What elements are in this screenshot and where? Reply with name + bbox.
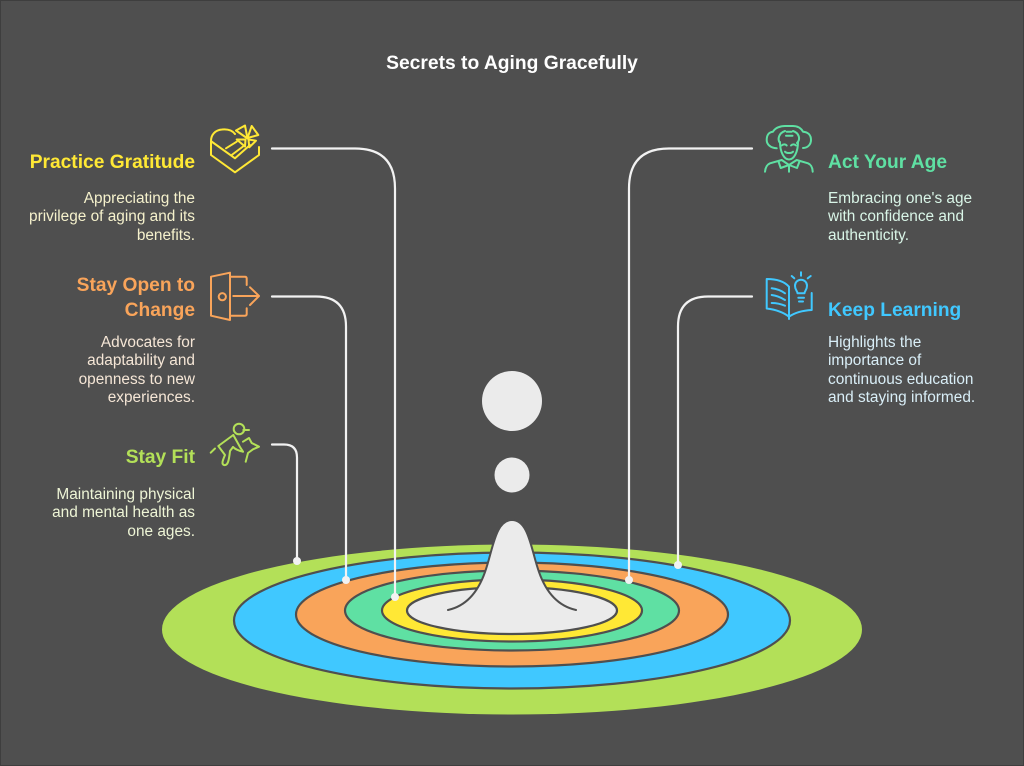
text: act your age xyxy=(828,190,972,244)
text: stay open to change: Advocates for xyxy=(101,334,195,351)
text: keep learning: continuous education xyxy=(828,371,973,388)
icon: heart gift box xyxy=(211,126,259,172)
ring: act your age xyxy=(345,570,679,650)
heading: practice gratitude: Practice Gratitude xyxy=(30,152,195,173)
dot: keep learning xyxy=(674,561,682,569)
heading: stay open to change: Stay Open to xyxy=(77,275,195,296)
text: practice gratitude: benefits. xyxy=(137,227,195,244)
peak outline xyxy=(448,520,576,610)
ring: stay open to change xyxy=(296,562,728,666)
text: keep learning xyxy=(828,334,975,406)
text: keep learning: importance of xyxy=(828,352,921,369)
text: practice gratitude: privilege of aging and its xyxy=(29,208,195,225)
connector: practice gratitude xyxy=(272,148,395,597)
connector: keep learning xyxy=(678,296,752,565)
text: stay fit: and mental health as xyxy=(52,504,195,521)
text: stay fit: Maintaining physical xyxy=(56,486,195,503)
ring: stay fit xyxy=(162,544,862,714)
dot: practice gratitude xyxy=(391,593,399,601)
connector: stay open to change xyxy=(272,296,346,580)
icon: exit door xyxy=(211,273,259,320)
title: Secrets to Aging Gracefully xyxy=(386,53,638,74)
peak xyxy=(448,520,576,610)
icon: book with light bulb xyxy=(767,272,812,319)
dot: stay fit xyxy=(293,557,301,565)
droplet: large xyxy=(482,371,542,431)
text: act your age: with confidence and xyxy=(828,208,964,225)
connectors xyxy=(272,148,752,597)
text: act your age: authenticity. xyxy=(828,227,909,244)
connector: stay fit xyxy=(272,444,297,561)
heading: stay open to change: Change xyxy=(125,300,195,321)
droplet: small xyxy=(494,458,530,492)
text: stay open to change: adaptability and xyxy=(87,352,195,369)
concentric rings xyxy=(162,544,862,714)
ring: keep learning xyxy=(234,552,790,688)
heading: keep learning: Keep Learning xyxy=(828,300,961,321)
heading: act your age: Act Your Age xyxy=(828,152,947,173)
text: act your age: Embracing one's age xyxy=(828,190,972,207)
icon: elderly person xyxy=(765,126,813,172)
text: practice gratitude: Appreciating the xyxy=(84,190,195,207)
ring: centre xyxy=(407,587,617,634)
ring: practice gratitude xyxy=(382,580,642,642)
connector dots xyxy=(293,557,682,601)
dot: act your age xyxy=(625,576,633,584)
text: practice gratitude xyxy=(29,190,195,244)
text: stay fit xyxy=(52,486,195,540)
text: stay open to change xyxy=(79,334,195,406)
heading: stay open to change xyxy=(77,275,195,321)
connector: act your age xyxy=(629,148,752,580)
heading: stay fit: Stay Fit xyxy=(126,447,195,468)
dot: stay open to change xyxy=(342,576,350,584)
icon: runner with dog xyxy=(211,424,259,465)
text: stay open to change: openness to new xyxy=(79,371,195,388)
text: keep learning: Highlights the xyxy=(828,334,921,351)
text: keep learning: and staying informed. xyxy=(828,389,975,406)
text: stay fit: one ages. xyxy=(127,523,195,540)
text: stay open to change: experiences. xyxy=(108,389,195,406)
